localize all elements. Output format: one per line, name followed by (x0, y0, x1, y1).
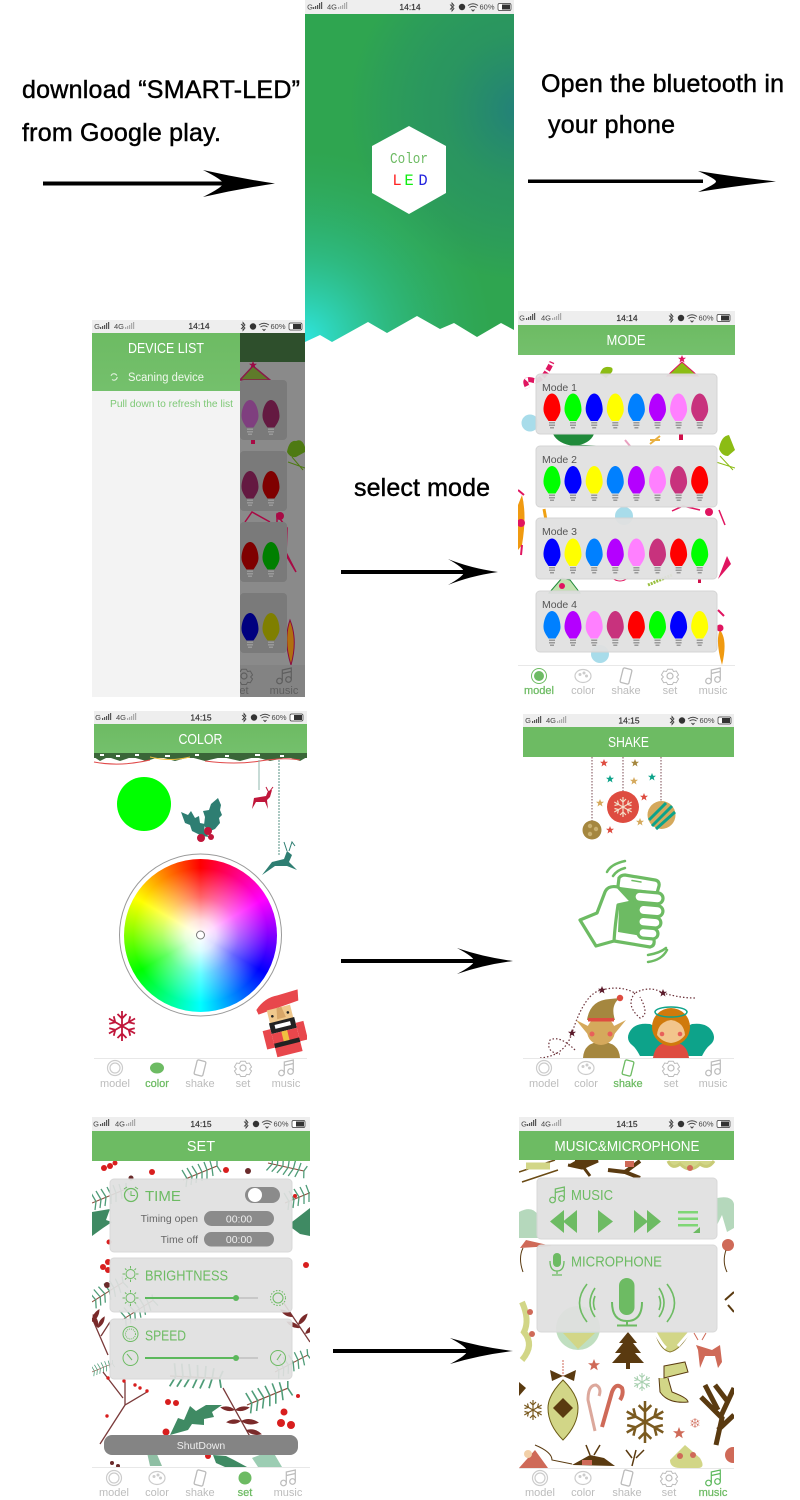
panel: device list screen (92, 320, 305, 697)
header (519, 1131, 734, 1160)
shutdown button (104, 1435, 298, 1455)
tab bar: music (274, 1487, 303, 1499)
foliage background (92, 1161, 310, 1467)
hexagon logo (372, 126, 446, 214)
icon: hand shaking phone (580, 861, 667, 962)
tab bar (92, 1467, 310, 1496)
card: mode 4: Mode 4 (542, 599, 577, 611)
card: time: TIME (145, 1188, 181, 1205)
header (92, 1131, 310, 1161)
status bar: 60% (270, 322, 286, 331)
caption: download SMART-LED (22, 76, 300, 147)
tab bar: set (662, 1487, 676, 1499)
card: mode 3 (536, 518, 717, 579)
holly leaves (92, 1208, 310, 1467)
tab bar: shake (185, 1078, 215, 1090)
status bar: 60% (479, 2, 495, 12)
red berries (100, 1160, 309, 1459)
dimmed mode background: music (270, 685, 299, 697)
status bar: G (519, 314, 525, 322)
card: time (110, 1179, 292, 1252)
tab bar: color (571, 685, 595, 697)
garland (94, 753, 307, 764)
panel: shake screen (523, 714, 734, 1090)
card: mode 1 (536, 374, 717, 434)
arrow: to shake screen (341, 948, 513, 974)
status bar (92, 1117, 310, 1131)
status bar: 14:14 (188, 321, 210, 331)
status bar: 4G (115, 1120, 125, 1128)
tab bar: model (99, 1487, 129, 1499)
snowflake (109, 1011, 135, 1041)
card: mode 4 (536, 591, 717, 652)
holly decoration (181, 798, 222, 842)
card: mode 1: Mode 1 (542, 382, 577, 394)
tab bar: music (699, 1487, 728, 1499)
arrow: to splash screen (43, 170, 275, 197)
status bar: 14:15 (616, 1119, 638, 1129)
status bar: G (521, 1120, 527, 1128)
tab bar: set (236, 1078, 250, 1090)
caption: open bluetooth: your phone (548, 111, 675, 139)
status bar: 4G (546, 716, 556, 725)
tab bar: set (238, 1487, 252, 1499)
card: brightness (110, 1258, 292, 1312)
status bar (92, 320, 305, 333)
header: SET (187, 1139, 215, 1155)
status bar: G (94, 322, 100, 331)
card: music (537, 1178, 717, 1239)
status bar: 4G (541, 314, 551, 322)
tab bar: color (145, 1078, 169, 1090)
hanging ornaments (582, 757, 676, 840)
tab bar: set (664, 1078, 678, 1090)
card: time: Timing open (141, 1213, 198, 1225)
status bar: G (93, 1120, 99, 1128)
caption: select mode: select mode (354, 474, 490, 502)
header: COLOR (178, 732, 222, 748)
christmas doodle background (517, 355, 735, 665)
panel: mode screen (517, 311, 735, 697)
tab bar: music (272, 1078, 301, 1090)
header (518, 325, 735, 355)
status bar: 14:15 (618, 716, 640, 726)
tab bar: shake (611, 685, 641, 697)
status bar: 60% (273, 1120, 289, 1128)
tab bar: color (574, 1078, 598, 1090)
hanging reindeer red (252, 760, 273, 809)
header: MUSIC&MICROPHONE (554, 1139, 700, 1155)
card: mode 2: Mode 2 (542, 454, 577, 466)
card: microphone (537, 1245, 717, 1332)
card: music: MUSIC (571, 1187, 613, 1204)
tab bar (519, 1468, 734, 1496)
tab bar: color (145, 1487, 169, 1499)
card: brightness: BRIGHTNESS (145, 1268, 228, 1284)
shutdown button: ShutDown (177, 1440, 225, 1452)
tab bar: model (525, 1487, 555, 1499)
tab bar (94, 1058, 307, 1090)
card: time: Time off (161, 1234, 198, 1246)
card: speed (110, 1319, 292, 1379)
hexagon logo: L (392, 172, 402, 190)
status bar (519, 1117, 734, 1131)
tab bar: model (100, 1078, 130, 1090)
header: SHAKE (608, 735, 649, 751)
status bar: 4G (541, 1120, 551, 1128)
card: time: 00:00 (226, 1234, 252, 1246)
caption: download SMART-LED: download “SMART-LED” (22, 76, 300, 104)
drawer panel (92, 333, 240, 697)
drawer panel: Scaning device (128, 372, 204, 384)
tab bar: music (699, 1078, 728, 1090)
status bar: 14:14 (399, 2, 421, 12)
dimmed mode background: et (239, 685, 249, 697)
status bar: 60% (698, 314, 714, 322)
dimmed mode background (235, 333, 305, 697)
hanging reindeer green (262, 760, 297, 875)
tab bar: color (571, 1487, 595, 1499)
status bar: 14:15 (190, 1119, 212, 1129)
tab bar (518, 665, 735, 697)
hexagon logo: Color (390, 151, 428, 168)
status bar: 4G (327, 2, 337, 12)
card: time: 00:00 (226, 1214, 252, 1226)
status bar: 4G (114, 322, 124, 331)
tab bar: shake (185, 1487, 215, 1499)
zigzag white bottom edge (305, 316, 514, 350)
status bar: 4G (116, 713, 126, 722)
hexagon logo: D (418, 172, 428, 190)
card: mode 2 (536, 446, 717, 507)
panel: splash screen (305, 0, 514, 350)
arrow: to device list (528, 171, 776, 192)
header (94, 724, 307, 753)
status bar: 60% (698, 1120, 714, 1128)
card: mode 3: Mode 3 (542, 526, 577, 538)
card: microphone: MICROPHONE (571, 1254, 662, 1270)
nutcracker (256, 989, 307, 1058)
status bar (518, 311, 735, 325)
status bar: 14:14 (616, 313, 638, 323)
arrow: to music screen (333, 1338, 513, 1364)
tab bar: model (529, 1078, 559, 1090)
tab bar (523, 1058, 734, 1090)
tab bar: set (663, 685, 677, 697)
tab bar: music (699, 685, 728, 697)
card: speed: SPEED (145, 1328, 186, 1344)
panel: color screen (94, 711, 312, 1090)
tab bar: shake (612, 1487, 642, 1499)
status bar: G (307, 2, 313, 12)
hexagon logo: E (404, 172, 414, 190)
status bar: 14:15 (190, 712, 212, 722)
caption: download SMART-LED: from Google play. (22, 119, 221, 147)
selected colour swatch (117, 777, 171, 831)
status bar: G (525, 716, 531, 725)
elf and angel illustration (540, 986, 714, 1058)
tab bar: shake (613, 1078, 643, 1090)
maroon branches (90, 1302, 318, 1444)
status bar (94, 711, 307, 724)
status bar: G (95, 713, 101, 722)
header: MODE (606, 333, 646, 349)
status bar (523, 714, 734, 727)
caption: open bluetooth: Open the bluetooth in (541, 70, 784, 98)
header (523, 727, 734, 757)
status bar (305, 0, 514, 14)
drawer panel: Pull down to refresh the list (110, 398, 233, 410)
drawer panel: DEVICE LIST (128, 341, 204, 357)
colour wheel (120, 854, 282, 1016)
caption: open bluetooth (541, 70, 784, 139)
panel: music screen (519, 1117, 741, 1500)
status bar: 60% (699, 716, 715, 725)
christmas doodle background (519, 1160, 741, 1468)
tab bar: model (524, 685, 554, 697)
panel: set screen (88, 1117, 323, 1500)
arrow: to mode screen (341, 559, 498, 585)
status bar: 60% (271, 713, 287, 722)
